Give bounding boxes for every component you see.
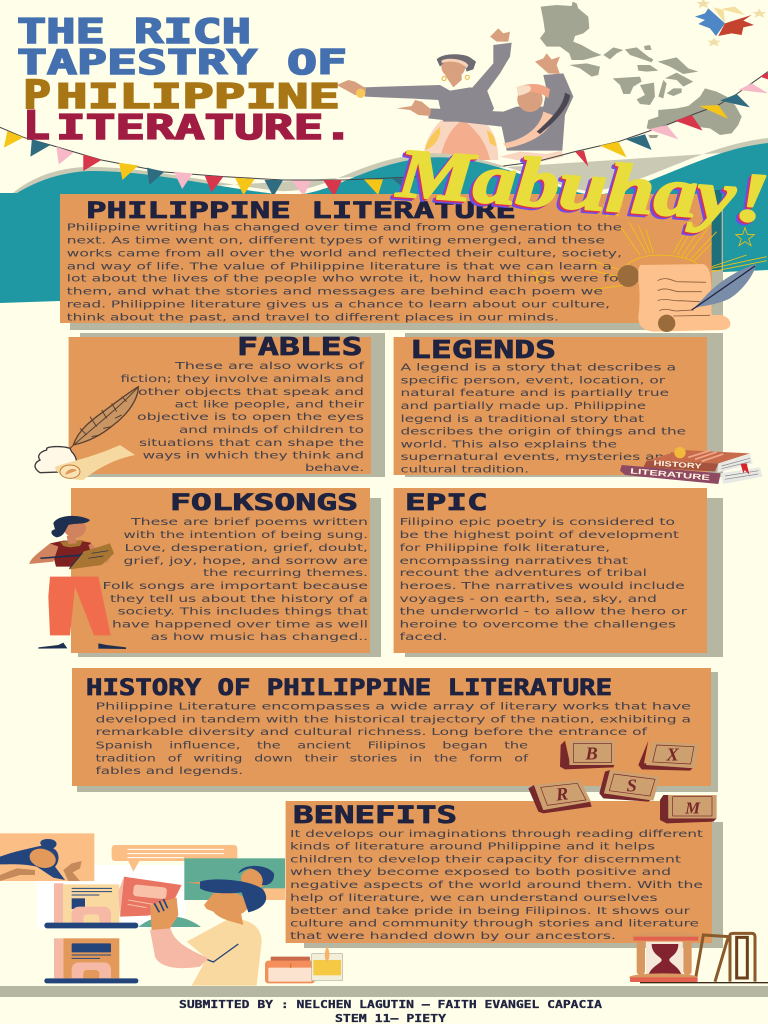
panel: Fables bbox=[69, 332, 385, 477]
panel: Legends bbox=[394, 333, 723, 477]
heading: Legends: LEGENDS bbox=[410, 335, 556, 364]
text: Legends: legend is a traditional story that bbox=[400, 414, 644, 425]
text: Epic: for Philippine folk literature, bbox=[400, 543, 610, 554]
block: B: B bbox=[585, 743, 598, 763]
book: Literature bbox=[620, 463, 762, 484]
text: Fables: act like people, and their bbox=[174, 400, 364, 410]
text: introduction: Philippine writing has changed over time and from one generation to the bbox=[67, 222, 622, 234]
text: Legends: and partially made up. Philippine bbox=[400, 401, 646, 412]
text: Folksongs: Folk songs are important because bbox=[102, 581, 368, 592]
text: Benefits: kinds of literature around Philippine and it helps bbox=[290, 842, 655, 852]
block: X: X bbox=[666, 745, 680, 765]
hourglass bbox=[629, 932, 699, 982]
green hill bbox=[138, 916, 201, 927]
heading: Philippine Literature: PHILIPPINE LITERATURE bbox=[86, 199, 516, 224]
text: History: fables and legends. bbox=[96, 766, 243, 777]
illustration: hourglass and bookends bbox=[629, 932, 768, 983]
text: Fables: These are also works of bbox=[173, 361, 365, 372]
dancer: woman bbox=[337, 28, 512, 160]
text: Benefits: when they become exposed to both positive and bbox=[290, 867, 671, 878]
icon: ink pot bbox=[35, 447, 76, 473]
panel: History of Philippine Literature bbox=[72, 668, 718, 792]
text: Epic: heroine to overcome the challenges bbox=[400, 620, 676, 630]
title: ITERATURE. bbox=[56, 108, 353, 148]
book: History bbox=[643, 447, 753, 473]
text: Legends: natural feature and is partially true bbox=[400, 388, 669, 399]
text: introduction: lot about the lives of the people who wrote it, how hard things were for bbox=[67, 274, 625, 284]
title: THE RICH bbox=[17, 12, 251, 52]
text: Epic: Filipino epic poetry is considered to bbox=[400, 517, 675, 528]
illustration: scroll and quill bbox=[617, 264, 756, 332]
title: TAPESTRY OF bbox=[17, 43, 347, 83]
text: introduction: next. As time went on, different types of writing emerged, and these bbox=[67, 236, 605, 246]
heading: Fables: FABLES bbox=[237, 332, 362, 361]
text: Legends: A legend is a story that describes a bbox=[400, 362, 676, 374]
text: Benefits: better and take pride in being Filipinos. It shows our bbox=[290, 906, 690, 917]
bookend frames bbox=[695, 933, 755, 982]
text: Fables: fiction; they involve animals and bbox=[120, 374, 364, 385]
text: Legends: describes the origin of things and the bbox=[400, 426, 686, 438]
icon: Philippine sun flag bbox=[695, 0, 766, 46]
text: Folksongs: grief, joy, hope, and sorrow are bbox=[124, 556, 368, 567]
block: M: M bbox=[684, 798, 701, 817]
text: Folksongs: they tell us about the history of a bbox=[110, 594, 368, 605]
text: Legends bbox=[400, 362, 686, 476]
text: History: Philippine Literature encompasses a wide array of literary works that have bbox=[96, 702, 691, 712]
panel: Philippine Literature bbox=[60, 190, 767, 330]
illustration: letter blocks bbox=[528, 740, 717, 823]
title: HILIPPINE bbox=[56, 77, 340, 117]
text: Folksongs: the recurring themes. bbox=[203, 568, 368, 579]
title bbox=[17, 12, 353, 149]
text: Folksongs: society. This includes things that bbox=[118, 606, 368, 618]
heading: Benefits: BENEFITS bbox=[293, 801, 457, 829]
block: R: R bbox=[554, 783, 569, 805]
text: introduction: them, and what the stories and messages are behind each poem we bbox=[67, 286, 603, 298]
text: introduction: and way of life. The value of Philippine literature is that we can learn a bbox=[67, 262, 612, 272]
text: Epic: voyages - on earth, sea, sky, and bbox=[400, 594, 657, 605]
bottom grey bar bbox=[0, 986, 768, 997]
block: B bbox=[560, 740, 615, 769]
text: Benefits: negative aspects of the world around them. With the bbox=[290, 880, 703, 891]
text: Folksongs: have happened over time as well bbox=[112, 620, 368, 630]
video tile: girl on green bbox=[184, 858, 285, 900]
block: R bbox=[528, 780, 592, 813]
decorative sun, rays and stars bbox=[533, 190, 767, 315]
text: Folksongs: with the intention of being sung. bbox=[124, 530, 368, 541]
block: X bbox=[638, 741, 698, 771]
text: Fables: and minds of children to bbox=[179, 425, 364, 436]
map of the Philippines bbox=[540, 2, 742, 138]
icon: feather bbox=[70, 387, 138, 448]
text: Epic: encompassing narratives that bbox=[400, 556, 628, 567]
text: introduction bbox=[67, 222, 625, 324]
text: Epic: faced. bbox=[400, 632, 448, 643]
text: Legends: specific person, event, location, or bbox=[400, 376, 665, 386]
text: History: Spanish influence, the ancient Filipinos began the bbox=[96, 740, 528, 752]
text: Folksongs: These are brief poems written bbox=[129, 517, 368, 528]
text: History bbox=[96, 702, 691, 777]
video tile: woman waving bbox=[0, 833, 94, 881]
text: Fables: objective is to open the eyes bbox=[137, 412, 364, 423]
text: History: tradition of writing down their stories in the form of bbox=[96, 754, 529, 764]
white backdrop bbox=[37, 865, 185, 928]
Mabuhay script lettering: Mabuhay! bbox=[392, 136, 768, 239]
text: introduction: read. Philippine literature gives us a chance to learn about our culture, bbox=[67, 300, 610, 310]
footer credits bbox=[179, 998, 602, 1024]
panel: Folksongs bbox=[71, 488, 381, 657]
bunting right bbox=[503, 72, 768, 167]
title: P bbox=[23, 73, 51, 118]
text: Epic: the underworld - to allow the hero or bbox=[400, 606, 687, 618]
text: Fables: situations that can shape the bbox=[139, 438, 364, 449]
text: introduction: think about the past, and travel to different places in our minds. bbox=[67, 312, 559, 324]
footer credits: SUBMITTED BY : NELCHEN LAGUTIN – FAITH EVANGEL CAPACIA bbox=[179, 998, 602, 1011]
shelf with book, upper bbox=[44, 883, 138, 928]
text: Epic: be the highest point of development bbox=[400, 530, 679, 541]
Mabuhay script lettering: Mabuhay! bbox=[390, 138, 768, 241]
dancer: man bbox=[397, 53, 573, 163]
block: S bbox=[599, 770, 660, 802]
title: L bbox=[23, 104, 50, 149]
shelf with book, lower bbox=[44, 938, 138, 983]
heading: Epic: EPIC bbox=[405, 491, 488, 516]
text: Benefits: It develops our imaginations through reading different bbox=[290, 829, 703, 840]
heading: Folksongs: FOLKSONGS bbox=[170, 491, 358, 516]
block: S: S bbox=[627, 776, 637, 796]
text: Benefits: help of literature, we can understand ourselves bbox=[290, 893, 658, 904]
book: Literature: LITERATURE bbox=[630, 466, 710, 482]
text: Benefits: culture and community through stories and literature bbox=[290, 918, 699, 930]
text: Benefits bbox=[290, 829, 703, 942]
illustration: two folk dancers bbox=[337, 28, 573, 163]
heading: History of Philippine Literature: HISTORY OF PHILIPPINE LITERATURE bbox=[86, 676, 612, 701]
text: History: remarkable diversity and cultural richness. Long before the entrance of bbox=[96, 727, 648, 738]
text: Legends: world. This also explains the bbox=[400, 440, 617, 450]
illustration: woman reading bbox=[29, 516, 126, 649]
text: Benefits: that were handed down by our ancestors. bbox=[290, 931, 616, 942]
book: History: HISTORY bbox=[653, 458, 702, 471]
panel: Epic bbox=[394, 488, 723, 657]
text: Folksongs: as how music has changed.. bbox=[150, 632, 368, 643]
text: Benefits: children to develop their capacity for discernment bbox=[290, 854, 681, 866]
text: introduction: works came from all over the world and reflected their culture, society, bbox=[67, 248, 622, 260]
text: Folksongs: Love, desperation, grief, doubt, bbox=[124, 543, 368, 554]
illustration: quill, ink pot and scroll bbox=[35, 387, 138, 480]
illustration: stack of books bbox=[620, 447, 762, 484]
illustration: people, books and reader bbox=[0, 833, 343, 986]
Mabuhay script lettering: Mabuhay! bbox=[394, 135, 768, 238]
text: Fables bbox=[120, 361, 365, 474]
text: Epic bbox=[400, 517, 687, 643]
bunting left bbox=[0, 127, 431, 197]
candles bbox=[265, 946, 343, 983]
text: Epic: recount the adventures of tribal bbox=[400, 568, 647, 579]
text: Legends: cultural tradition. bbox=[400, 464, 529, 476]
reader with book bbox=[118, 877, 266, 986]
text: History: developed in tandem with the historical trajectory of the nation, exhibiting a bbox=[96, 714, 691, 726]
speech bubble bbox=[112, 845, 237, 872]
block: M bbox=[660, 795, 717, 823]
text: Folksongs bbox=[102, 517, 368, 643]
icon: rolled paper bbox=[55, 445, 135, 480]
text: Fables: other objects that speak and bbox=[138, 387, 364, 398]
text: Epic: heroes. The narratives would include bbox=[400, 581, 685, 592]
text: Legends: supernatural events, mysteries and bbox=[400, 452, 674, 463]
panel: Benefits bbox=[286, 801, 723, 948]
text: Fables: ways in which they think and bbox=[143, 450, 364, 462]
text: Fables: behave. bbox=[305, 463, 364, 474]
teal wave band bbox=[0, 138, 768, 303]
